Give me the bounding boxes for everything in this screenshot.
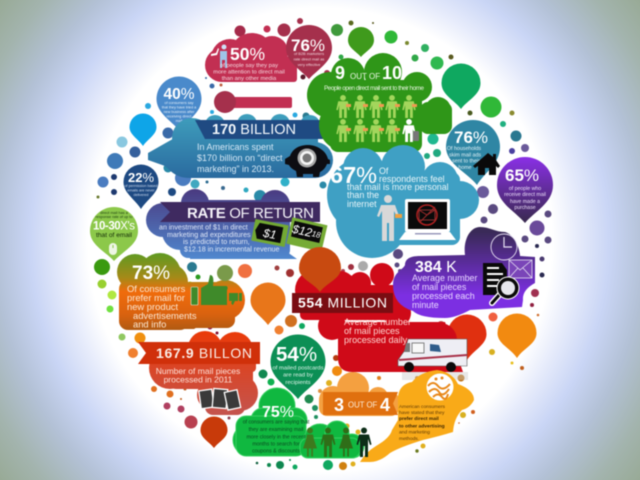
panel: 54 percent drop: of mailed postcards — [272, 366, 324, 372]
panel: 3 out of 4 cloud: OUT OF — [348, 400, 378, 410]
icon: green drop — [348, 27, 374, 57]
panel: 65 percent drop: receive direct mail — [504, 192, 546, 198]
text: 170 billion caption: marketing” in 2013. — [197, 164, 274, 174]
panel: 73 percent cloud — [117, 253, 245, 330]
text: 67 percent caption: internet — [347, 199, 377, 209]
icon: big green drop — [442, 63, 480, 109]
text: 167.9 billon caption: Number of mail pieces — [156, 366, 240, 376]
text: 67 percent caption: Of — [379, 166, 389, 176]
text: 75 percent caption: of consumers are saying that — [243, 420, 310, 426]
decorative dots: pink and red group — [234, 18, 539, 329]
banner — [138, 342, 260, 364]
pictogram: couple figures — [303, 428, 372, 457]
chart: pink bar — [214, 91, 292, 113]
icon: person with arrow — [211, 44, 227, 68]
icon: thumbs up and down — [191, 265, 242, 305]
panel: 22 percent drop — [124, 164, 158, 209]
amber shape — [360, 370, 474, 462]
text: 554 million caption: Average number — [344, 317, 411, 327]
panel: 76 percent marketers drop — [286, 25, 332, 79]
icon: dollar bills: $1 — [261, 226, 278, 242]
text: 3 out of 4 caption: methods. — [399, 436, 419, 442]
text: 75 percent caption: months to search for — [252, 442, 300, 448]
panel: 10-30X drop: direct mail has a — [100, 211, 129, 215]
panel: 50 percent cloud — [205, 33, 297, 82]
panel: 3 out of 4 cloud: 4 — [380, 395, 390, 415]
icon: mouse — [109, 243, 117, 255]
text: 3 out of 4 caption: have stated that they — [399, 410, 445, 416]
heading: 3 out of 4: 3 — [334, 395, 344, 415]
panel: 54 percent drop — [270, 334, 326, 399]
panel: 22 percent drop: emails are never — [127, 188, 155, 192]
panel: 40 percent drop: of consumers say — [165, 101, 194, 105]
text: 50 percent caption: than any other media — [222, 76, 277, 82]
icon: document with magnifier — [483, 263, 519, 303]
panel: 67 percent cloud — [327, 145, 479, 258]
icon: clock — [491, 234, 517, 260]
text: 67 percent caption: that mail is more personal — [347, 182, 449, 192]
heading: 384 K: 384 K — [415, 259, 457, 276]
icon: laptop with crossed mail — [399, 199, 456, 240]
text: 75 percent caption: more closely in the recent — [246, 434, 306, 440]
panel: 170 billion cloud — [148, 114, 333, 178]
panel: 40 percent drop — [156, 76, 202, 130]
banner — [160, 202, 320, 222]
icon: mail sheets — [199, 388, 241, 410]
text: 75 percent caption: coupons & discounts — [252, 448, 300, 454]
panel: 76 percent households drop: Of households — [447, 146, 481, 152]
panel: 40 percent drop: 40% — [163, 86, 195, 103]
banner — [323, 392, 398, 415]
icon: orange drop left — [250, 282, 286, 325]
panel: rate of return cloud — [146, 189, 327, 259]
icon: red drop — [448, 315, 486, 360]
banner — [292, 293, 393, 313]
heading: 75%: 75% — [262, 404, 294, 421]
text: 73 percent caption: advertisements — [133, 310, 197, 321]
panel: 384 K cloud — [393, 227, 535, 318]
panel: 76 percent households drop: skim mail ads — [449, 152, 481, 158]
panel: 3 out of 4 cloud — [319, 370, 474, 462]
text: 50 percent caption: more attention to direct mail — [213, 70, 285, 76]
text: 384 K caption: processed each — [412, 291, 475, 301]
text: 67 percent caption: respondents feel — [379, 174, 445, 184]
text: 73 percent caption: Of consumers — [127, 283, 186, 294]
panel: 9 out of 10 cloud — [307, 53, 452, 152]
panel: 9 out of 10 cloud: 10 — [382, 63, 402, 83]
text: 384 K caption: minute — [412, 300, 439, 310]
text: 67 percent caption: than the — [347, 190, 379, 200]
panel: 10-30X drop: 10-30X's — [93, 220, 135, 232]
icon: blue drop — [130, 114, 156, 146]
text: 73 percent caption: new product — [127, 301, 178, 312]
text: 75 percent caption: they are examining mail — [249, 427, 303, 433]
icon: piggy bank — [285, 145, 330, 177]
heading: 554 million: 554 MILLION — [298, 294, 387, 310]
text: 170 billion caption: $170 billion on “direct — [197, 153, 283, 163]
panel: 9 out of 10 cloud: OUT OF — [350, 72, 380, 81]
text: 3 out of 4 caption: and marketing — [399, 430, 430, 436]
panel: 22 percent drop: 22% — [128, 170, 154, 185]
panel: 22 percent drop: delivered — [134, 193, 148, 197]
text: 170 billion caption: In Americans spent — [197, 142, 274, 152]
panel: 65 percent drop: 65% — [505, 166, 539, 185]
heading: 73%: 73% — [132, 263, 170, 284]
pictogram: people with mail — [336, 95, 419, 142]
icon: mail truck — [398, 339, 468, 380]
text: rate of return caption: $12.18 in incremental revenue — [184, 246, 279, 254]
text: 554 million caption: of mail pieces — [344, 326, 400, 336]
decorative dots: purple group — [393, 130, 552, 278]
heading: 50%: 50% — [230, 44, 265, 64]
panel: 22 percent drop: of permission based — [124, 184, 158, 188]
heading: 9 out of 10: 9 — [335, 63, 345, 83]
icon: dollar bills: 18 — [311, 229, 322, 240]
icon: dark orange drop — [299, 247, 341, 292]
text: 3 out of 4 caption: to other advertising — [399, 424, 445, 430]
text: 554 million caption: processed daily — [344, 335, 408, 345]
heading: 167.9 billon: 167.9 BILLON — [156, 345, 252, 361]
panel: 10-30X drop: that of email — [96, 232, 132, 239]
panel: 76 percent marketers drop: very effective — [298, 62, 320, 67]
heading: 67%: 67% — [330, 162, 377, 188]
icon: orange drop right — [498, 314, 536, 358]
panel: 554 million cloud — [292, 247, 463, 372]
text: 3 out of 4 caption: American consumers — [399, 404, 445, 410]
panel: 76 percent marketers drop: of B2B marketers — [294, 51, 324, 56]
decorative dots: orange group — [128, 315, 524, 470]
panel: 76 percent marketers drop: 76% — [291, 36, 325, 55]
panel: 76 percent households drop — [446, 120, 500, 185]
icon: dollar bills — [251, 217, 327, 252]
panel: 65 percent drop — [497, 157, 553, 223]
icon: dark orange drop bottom — [200, 416, 228, 448]
panel: 65 percent drop: of people who — [509, 186, 541, 192]
heading: rate of return: RATE OF RETURN — [187, 205, 314, 222]
panel: 76 percent households drop: 76% — [454, 128, 488, 147]
text: 73 percent caption: and info — [133, 318, 166, 330]
heading: 170 billion: 170 BILLION — [212, 122, 296, 138]
text: 73 percent caption: prefer mail for — [127, 292, 185, 303]
panel: 40 percent drop: that they have tried a — [162, 106, 197, 110]
text: 384 K caption: of mail pieces — [412, 282, 467, 292]
icon: flag globe — [426, 374, 454, 400]
text: 167.9 billon caption: processed in 2011 — [164, 374, 233, 384]
banner — [195, 120, 323, 139]
panel: 40 percent drop: new business after — [164, 110, 195, 114]
decorative dots: blue group — [96, 77, 326, 272]
decorative dots: green group — [94, 20, 514, 470]
panel: 76 percent households drop: home — [458, 165, 472, 171]
text: rate of return caption: an investment of $1 in direct — [159, 224, 248, 232]
text: 9 out of 10 caption: People open direct mail sent to their home — [324, 85, 424, 92]
panel: 10-30X drop: response rate of up to — [96, 215, 132, 219]
panel: 40 percent drop: mail — [176, 119, 183, 123]
text: 50 percent caption: of people say they pay — [220, 63, 278, 69]
icon: envelope — [509, 260, 532, 278]
panel: 76 percent households drop: sent to their — [452, 158, 480, 164]
panel: 54 percent drop: are read by — [283, 372, 313, 378]
panel: 167.9 billon cloud — [138, 331, 260, 415]
panel: 65 percent drop: have made a — [510, 199, 540, 205]
text: rate of return caption: marketing ad expenditures — [167, 231, 251, 239]
panel: 40 percent drop: receiving direct — [167, 114, 191, 118]
icon: dollar bills: $12 — [291, 222, 313, 240]
panel: 54 percent drop: 54% — [276, 343, 317, 366]
panel: 65 percent drop: purchase — [514, 205, 536, 211]
text: 384 K caption: Average number — [412, 273, 477, 283]
text: rate of return caption: is predicted to return, — [183, 238, 250, 246]
panel: 75 percent cloud — [233, 388, 372, 458]
icon: house — [473, 153, 500, 175]
panel: 10-30X drop — [90, 207, 138, 261]
text: 3 out of 4 caption: prefer direct mail — [399, 416, 439, 422]
icon: man with letter — [377, 195, 402, 241]
panel: 76 percent marketers drop: rate direct mail as — [294, 56, 324, 62]
panel: 54 percent drop: recipients — [285, 380, 311, 386]
